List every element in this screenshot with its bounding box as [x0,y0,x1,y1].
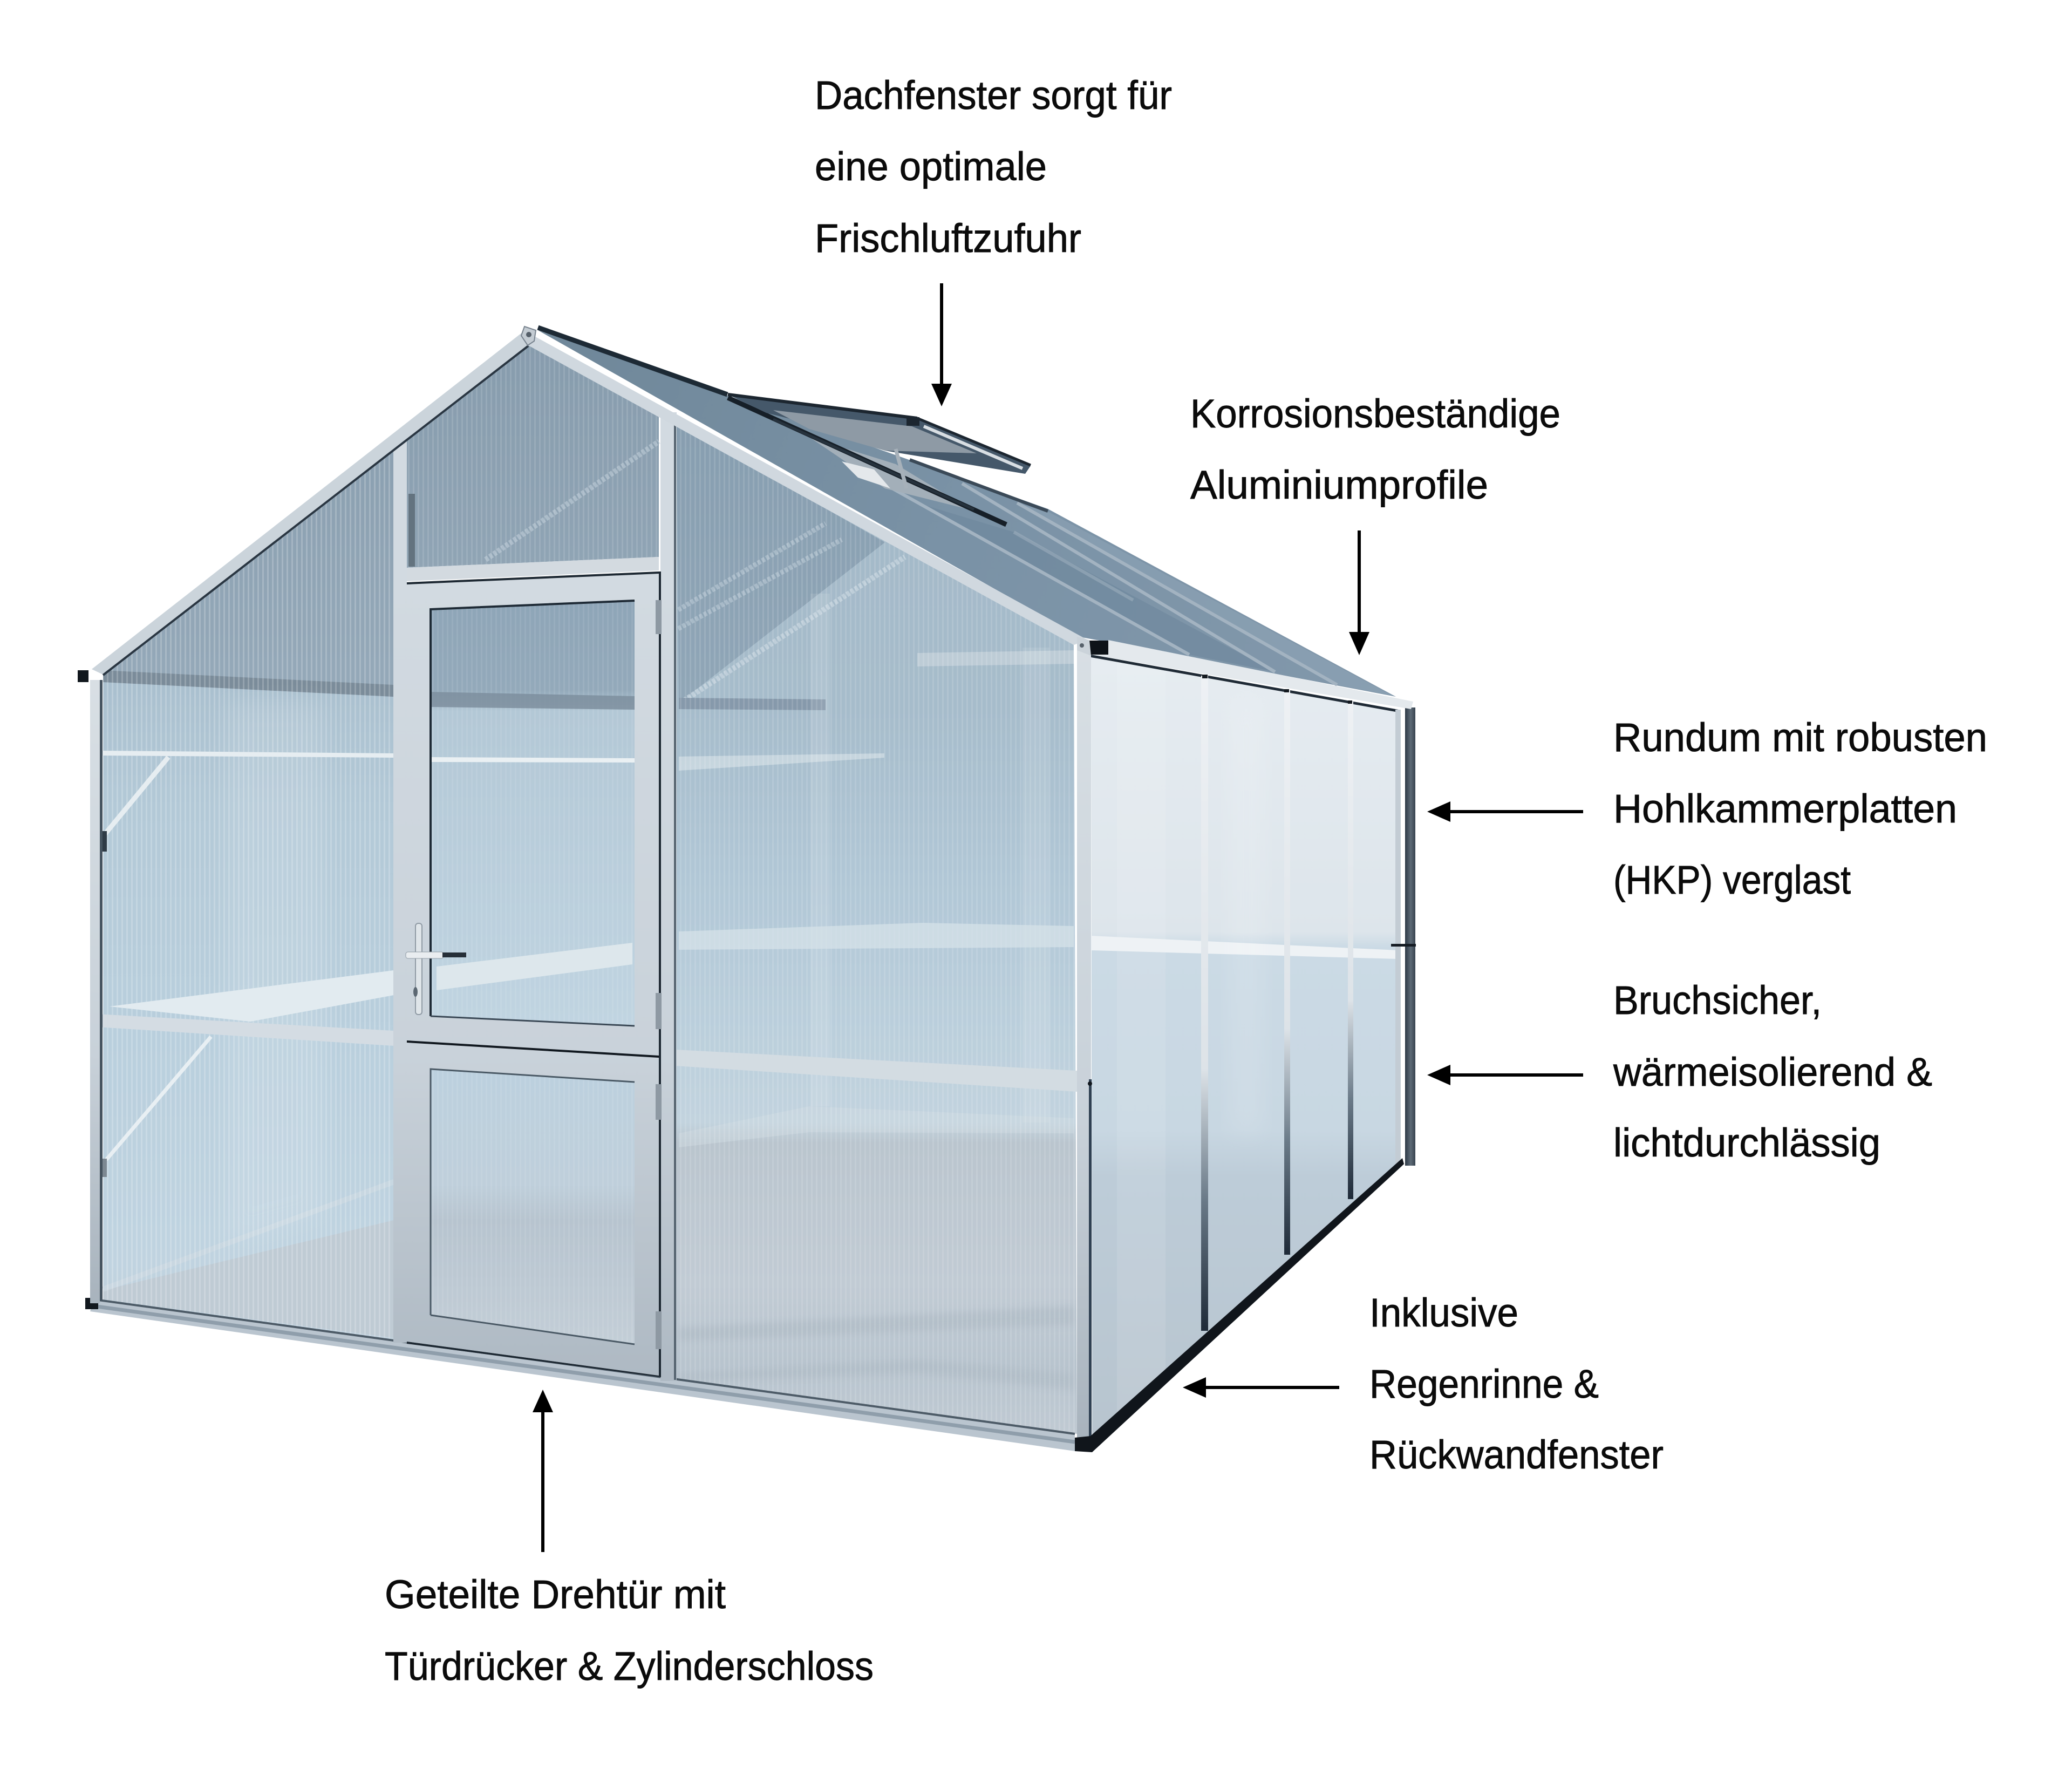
left mid rail [97,1014,394,1046]
arrow: to aluminium profile [1349,530,1369,655]
lower shelf left [100,970,394,1177]
callout: Regenrinne: Regenrinne & [1369,1362,1599,1406]
greenhouse illustration [78,326,1416,1452]
callout: Drehtür: Geteilte Drehtür mit [385,1572,726,1617]
frame posts [90,412,1092,1441]
left front panel [97,451,394,1340]
sill [85,1298,1075,1451]
eave caps and gutter [78,637,1413,709]
side wall mullions [1201,676,1401,1331]
callout: Dachfenster: eine optimale [815,144,1047,189]
callout: Drehtür [385,1572,874,1689]
arrow: to base rail [1183,1377,1339,1398]
callout: Dachfenster [815,73,1172,261]
callout: Hohlkammerplatten: Rundum mit robusten [1613,715,1987,760]
arrow: to roof window [931,283,952,406]
rear gutter downpipe [1391,707,1416,1166]
arrow: to side wall upper [1427,801,1583,822]
upper gable panel above door [407,345,659,568]
callout: Aluminiumprofile [1190,391,1560,507]
callout: Dachfenster: Dachfenster sorgt für [815,73,1172,118]
roof glazing [538,328,1396,697]
callout: Bruchsicher [1613,978,1932,1165]
door hinges [656,600,662,1349]
callout: Hohlkammerplatten: Hohlkammerplatten [1613,786,1957,831]
callout: Bruchsicher: lichtdurchlässig [1613,1120,1880,1165]
callout: Hohlkammerplatten: (HKP) verglast [1613,858,1851,902]
callout: Bruchsicher: wärmeisolierend & [1613,1050,1932,1094]
roof window [728,394,1031,525]
callout: Regenrinne: Inklusive [1369,1290,1518,1335]
callout: Dachfenster: Frischluftzufuhr [815,216,1081,261]
door [406,571,662,1377]
arrow: to door [533,1390,553,1552]
top shelf left [100,751,394,852]
door upper glass [431,601,635,1026]
callout: Drehtür: Türdrücker & Zylinderschloss [385,1644,874,1689]
callout: Regenrinne: Rückwandfenster [1369,1432,1664,1477]
callout: Hohlkammerplatten [1613,715,1987,902]
door lower glass [431,1069,635,1344]
lower shelf right [679,923,1074,950]
callout: Aluminiumprofile: Korrosionsbeständige [1190,391,1560,436]
rake beams [92,326,1088,675]
arrow: to side wall lower [1427,1065,1583,1085]
side wall panels [1091,655,1399,1446]
callout: Bruchsicher: Bruchsicher, [1613,978,1822,1023]
callout: Regenrinne [1369,1290,1664,1477]
black base rail [1075,1158,1404,1452]
right front panel [675,424,1077,1434]
callout: Aluminiumprofile: Aluminiumprofile [1190,462,1488,507]
door handle and lock [406,923,466,1015]
right mid rail [675,1050,1077,1092]
door split line [407,1040,659,1058]
